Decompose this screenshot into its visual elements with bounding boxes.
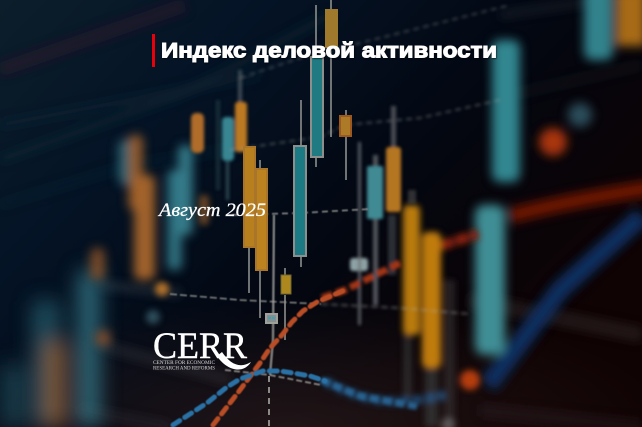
logo tagline: CENTER FOR ECONOMIC (153, 360, 215, 366)
blurred orange line segment (440, 234, 478, 246)
candle: small orange (340, 116, 351, 136)
right blurred candles and markers (475, 0, 642, 385)
logo: CERR (153, 326, 251, 372)
grid lines (170, 0, 510, 427)
mid-focus candles (321, 106, 420, 407)
logo wordmark: CERR (153, 326, 247, 367)
sharp candlesticks (244, 0, 351, 340)
far-left blurred candles (0, 270, 100, 427)
logo tagline: RESEARCH AND REFORMS (153, 366, 215, 372)
candle: orange tall left (244, 147, 255, 247)
candle: teal (294, 146, 306, 256)
candle: teal upper (311, 57, 323, 157)
title accent bar (152, 34, 155, 67)
candle: wicks (248, 0, 346, 340)
candle: small indicator (266, 314, 277, 323)
candle: orange tall right (256, 169, 267, 270)
title: Индекс деловой активности (161, 40, 497, 62)
date: Август 2025 (157, 200, 266, 221)
candle: small gold (281, 275, 291, 294)
logo swash (217, 352, 251, 370)
candle: gold top (326, 10, 337, 47)
blue dashed line (173, 371, 325, 425)
orange dashed line (213, 290, 345, 425)
